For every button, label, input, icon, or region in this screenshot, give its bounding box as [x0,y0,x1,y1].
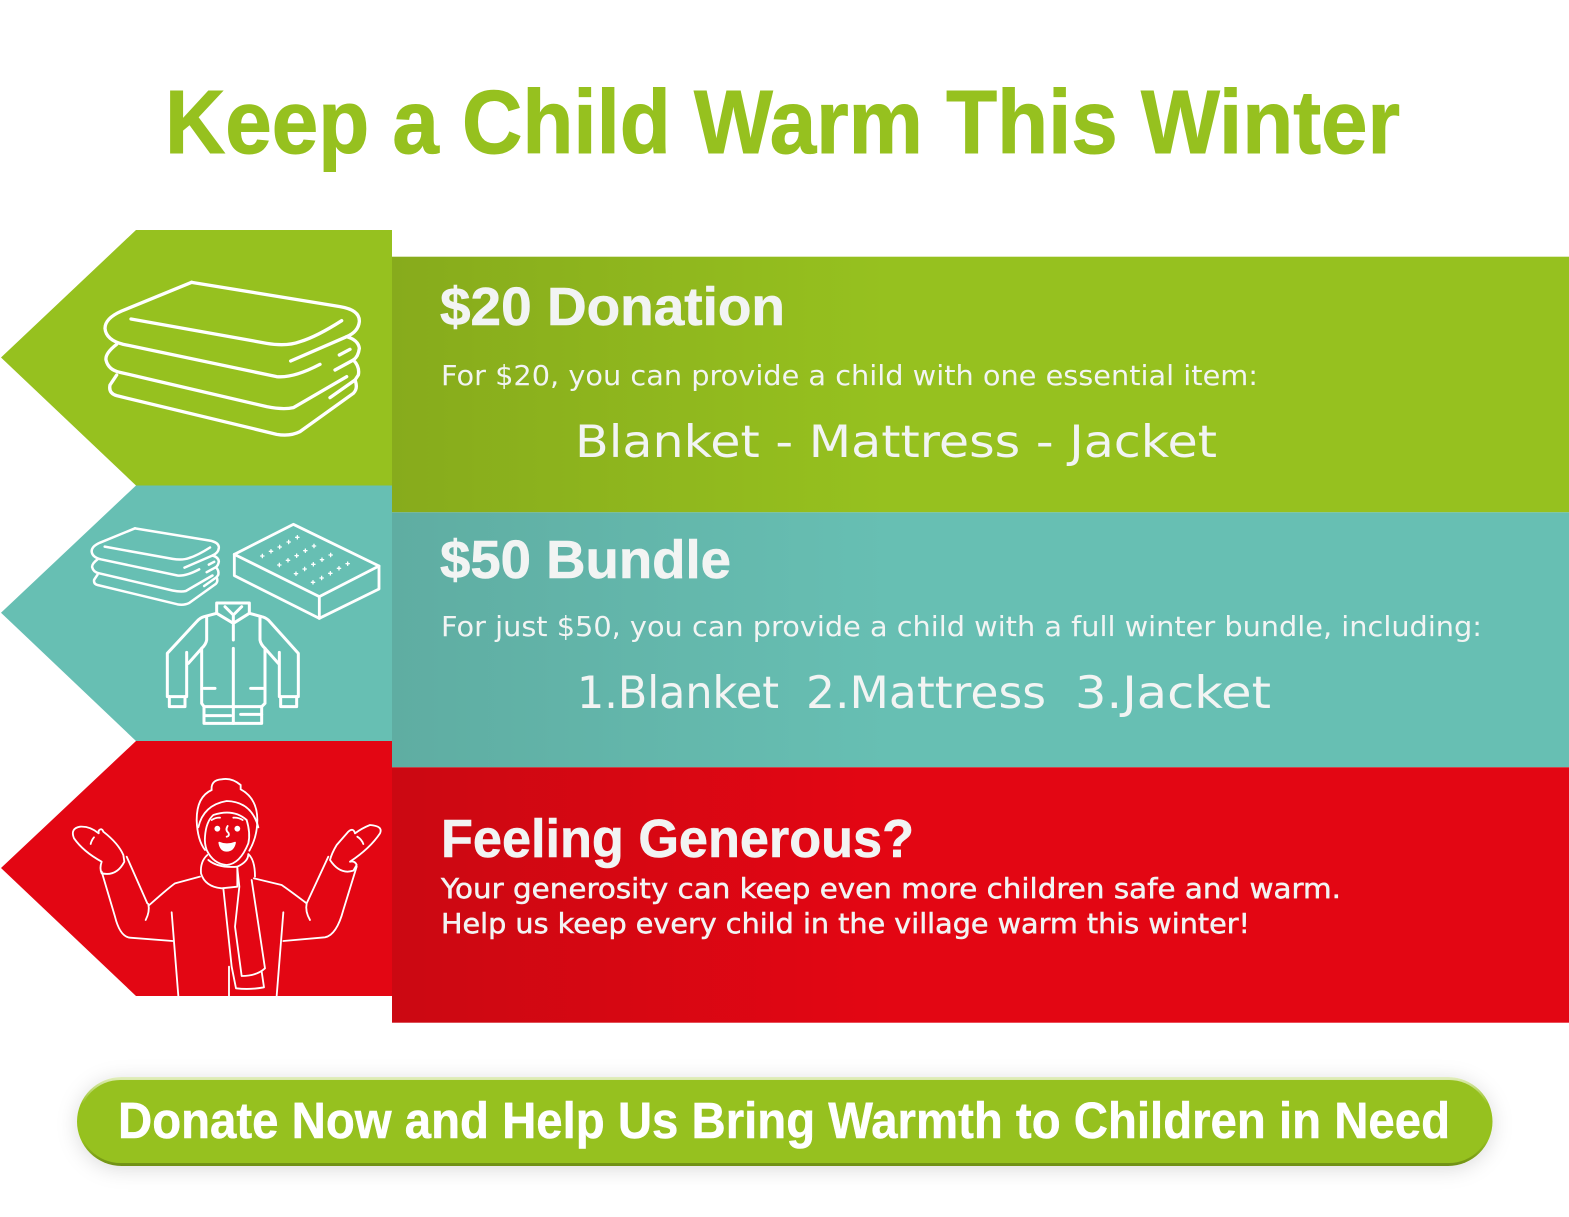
button: donate now: Donate Now and Help Us Bring Warmth to Children in Need [118,1092,1450,1149]
arrow: $50 bundle [1,486,392,741]
text: $50 description: For just $50, you can provide a child with a full winter bundle, including: [441,611,1482,643]
text: $50 item list [577,668,1271,719]
text: $50 item list: 2.Mattress [806,668,1046,719]
mittens [73,827,124,874]
text: $20 items: Blanket - Mattress - Jacket [575,417,1217,468]
icon: mattress [234,524,379,618]
body [127,857,200,905]
icon: folded blankets [105,282,359,435]
button: donate now [77,1077,1492,1166]
arrow: $20 donation [1,230,392,486]
heading: feeling generous: Feeling Generous? [441,809,914,869]
text: generosity line two: Help us keep every child in the village warm this winter! [441,908,1250,940]
band: $20 donation [392,257,1569,512]
face [205,813,249,865]
panel: $50 bundle [1,486,1569,767]
icon: small blankets [92,528,219,605]
icon: jacket [167,603,298,723]
band: $50 bundle [392,512,1569,767]
icon: blankets, mattress and jacket [92,524,379,723]
title: Keep a Child Warm This Winter [165,73,1400,173]
text: $50 item list: 1.Blanket [577,668,779,719]
heading: $50 bundle: $50 Bundle [440,530,731,590]
icon: person in winter clothes shrugging [73,779,381,996]
text: $20 description: For $20, you can provide a child with one essential item: [441,360,1258,392]
text: $50 item list: 3.Jacket [1075,668,1271,719]
heading: $20 donation: $20 Donation [440,277,785,337]
text: generosity line one: Your generosity can keep even more children safe and warm. [440,873,1341,905]
band: feeling generous [392,767,1569,1023]
panel: $20 donation [1,230,1569,512]
scarf [201,855,237,888]
panel: feeling generous [1,741,1569,1023]
arrow: feeling generous [1,741,392,996]
hat [197,779,257,851]
